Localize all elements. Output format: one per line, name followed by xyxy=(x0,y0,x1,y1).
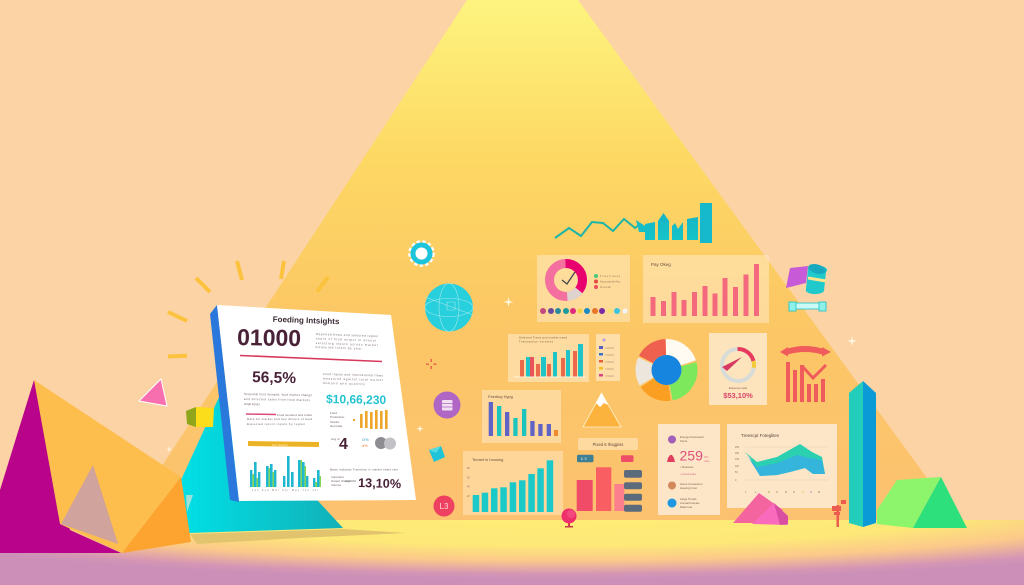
panel: teal growth bar card xyxy=(463,451,563,515)
x axis ticks: H xyxy=(776,490,778,494)
x axis ticks: 1 xyxy=(755,490,757,494)
check mark xyxy=(562,272,575,284)
card header: Pixed 6 Ihagpiss xyxy=(593,442,623,447)
donut legend: Overall xyxy=(600,285,611,289)
bars xyxy=(473,460,553,512)
intro text xyxy=(316,332,378,351)
stat four: 4 xyxy=(339,436,348,453)
sub rows xyxy=(680,465,697,476)
magenta facet xyxy=(0,380,121,553)
panel: pink bar chart card xyxy=(643,255,769,323)
donut chart xyxy=(550,264,582,296)
axis labels: 40 xyxy=(467,486,470,488)
legend rows: Category xyxy=(605,374,615,378)
icon: pink triangle xyxy=(139,379,167,406)
list row three: Data note xyxy=(680,505,693,509)
orange facet xyxy=(122,477,191,553)
red bars xyxy=(577,467,624,511)
axis labels: 60 xyxy=(467,476,470,480)
pink rule with text: Data for market and key drivers of feed xyxy=(247,417,312,421)
bottom note: Output change xyxy=(331,479,351,483)
x axis ticks xyxy=(745,490,820,494)
axis labels: 100 xyxy=(735,465,740,468)
list row two: Housing Cost xyxy=(680,486,697,490)
legend rows xyxy=(599,346,615,378)
card title: Treescpt Foteglites xyxy=(741,433,780,438)
paragraph left xyxy=(244,392,312,407)
panel: stat list card xyxy=(658,424,720,515)
icon: red signpost xyxy=(832,500,846,527)
stat percentage: 56,5% xyxy=(252,369,296,387)
money figure: $10,66,230 xyxy=(326,392,387,407)
area layers xyxy=(745,444,825,476)
icon: gear xyxy=(410,242,434,266)
paragraph left: small inputs xyxy=(244,402,260,406)
card title: Tenant in housing xyxy=(472,457,503,462)
icon: red arrows and bars xyxy=(780,346,831,402)
list row one: Energy Framework xyxy=(680,435,704,439)
list row two: Home Conversion xyxy=(680,482,703,486)
panel: legend card xyxy=(596,334,620,381)
stat four: , xyxy=(349,443,350,448)
small list: Stocks xyxy=(330,420,340,424)
x axis ticks: B xyxy=(785,490,787,494)
intro text: selecting inputs across market xyxy=(316,341,378,347)
icon: teal cube xyxy=(429,446,445,462)
intro text: measured totals by year xyxy=(316,345,362,351)
icon: red target mark xyxy=(426,359,436,369)
stat note right xyxy=(323,372,384,387)
big stat: 259 xyxy=(680,448,703,464)
grouped bars xyxy=(514,344,586,377)
yellow facet xyxy=(34,380,181,553)
axis labels xyxy=(467,467,470,498)
donut legend: Accountability xyxy=(600,280,621,284)
axis labels: 250 xyxy=(735,446,740,449)
gauge value: $53,10% xyxy=(723,391,753,400)
legend pills: £ 3 xyxy=(581,456,587,461)
card heading: Transaction volumes xyxy=(519,340,554,344)
small list: Food xyxy=(330,411,337,415)
legend rows: Category xyxy=(605,346,615,350)
card heading: Selected Trend and market trend xyxy=(519,336,567,340)
pale sliver xyxy=(186,495,193,512)
icon: red badge: L3 xyxy=(440,502,449,511)
icon row xyxy=(540,308,628,314)
icon: yellow cube xyxy=(186,407,214,427)
panel: red bars card xyxy=(577,438,642,512)
intro text: share of food output in annual xyxy=(316,336,376,343)
x axis ticks: A xyxy=(802,490,804,494)
list row two xyxy=(668,482,703,490)
list row one: Score xyxy=(680,439,688,443)
axis labels: 200 xyxy=(735,452,740,455)
axis labels xyxy=(735,446,740,482)
icon: snow mountain xyxy=(583,393,621,427)
report page xyxy=(217,305,416,501)
x axis ticks: N xyxy=(793,490,795,494)
donut legend xyxy=(594,274,621,289)
bars xyxy=(650,264,759,316)
intro text: Reported flows and selected region xyxy=(316,332,378,338)
legend rows: Category xyxy=(605,368,615,370)
icon: green tent xyxy=(877,477,967,528)
icon: teal pyramid behind report xyxy=(181,395,343,533)
list row three xyxy=(668,497,700,509)
card title: Feeding Hypg xyxy=(488,394,513,399)
big stat xyxy=(667,448,710,464)
pink rule with text xyxy=(246,413,312,426)
big stat: 0% xyxy=(704,455,709,459)
axis labels: 150 xyxy=(735,458,740,461)
sub rows: • Linked sales xyxy=(680,472,697,476)
panel: gauge card xyxy=(709,333,767,405)
grey badges xyxy=(362,437,396,450)
small list xyxy=(330,411,345,428)
x axis ticks: B xyxy=(768,490,770,494)
legend rows: Category xyxy=(605,360,615,364)
tan facet xyxy=(61,465,118,544)
pink rule with text: Expected return inputs by region xyxy=(247,422,305,426)
card title: Pay Okeg xyxy=(651,262,671,267)
grid lines xyxy=(745,447,828,480)
decorative rays xyxy=(168,261,328,356)
panel: grouped bar card xyxy=(508,334,589,382)
list row three: Large Trends xyxy=(680,497,697,501)
mini bar chart xyxy=(250,456,321,492)
yellow header bar: Key Section xyxy=(272,443,288,447)
x axis ticks: N xyxy=(810,490,812,494)
grey badges: a% xyxy=(362,443,368,448)
panel: donut card xyxy=(537,255,630,322)
bottom note: Basic indicator Transition in market share rate xyxy=(330,468,398,472)
yellow header bar xyxy=(248,441,319,447)
left geometric shapes xyxy=(0,380,193,553)
list row three: Annual forecast xyxy=(680,501,700,505)
stat four xyxy=(331,436,350,453)
stat four: Avg of xyxy=(331,437,340,441)
pink rule with text: Food demand and bullet xyxy=(277,413,312,417)
mini bar chart: Jan Feb Mar Apr May Jun Jul xyxy=(252,489,318,492)
axis labels: 20 xyxy=(467,495,470,498)
axis labels: 0 xyxy=(735,479,737,482)
icon: teal blue column xyxy=(849,381,876,527)
small list: Net trade xyxy=(330,424,343,428)
report title: Foeding Intsights xyxy=(273,315,340,326)
orange bars xyxy=(353,410,388,429)
bottom note xyxy=(330,468,398,487)
grey pills xyxy=(624,470,642,512)
x axis ticks: M xyxy=(818,490,820,494)
list row one xyxy=(668,435,704,444)
floor xyxy=(0,520,1024,585)
gauge needle xyxy=(722,357,742,371)
stat note right: demand and quantity xyxy=(323,381,365,386)
sub rows: • Tenancies xyxy=(680,465,694,469)
legend rows: Category xyxy=(605,354,615,356)
panel: report sheet xyxy=(210,305,416,502)
dumbbell bar xyxy=(789,302,826,311)
chart: teal line and bars xyxy=(555,203,712,243)
icon: globe xyxy=(425,284,473,332)
bars xyxy=(489,402,558,436)
grey badges: O% xyxy=(362,437,369,442)
axis labels: 80 xyxy=(467,467,470,470)
gauge dial xyxy=(722,349,754,381)
panel: area chart card xyxy=(727,424,837,508)
stat note right: Food inputs and international flows xyxy=(323,372,384,378)
stat note right: measured against total market xyxy=(323,376,383,382)
icon: red badge xyxy=(434,496,454,516)
light beam trapezoid xyxy=(120,0,965,530)
icon: flag and cylinder xyxy=(786,262,827,311)
bottom note: Important xyxy=(331,475,344,479)
big number: 01000 xyxy=(237,324,301,351)
paragraph left: and selected sales from food markets xyxy=(244,397,310,402)
small list: Production xyxy=(330,415,345,419)
icon: red pin ball xyxy=(562,508,576,528)
bottom note: Volume xyxy=(331,483,341,487)
report shadow xyxy=(190,529,406,544)
gauge label: Expense ratio xyxy=(729,386,747,390)
x axis ticks: 1 xyxy=(745,490,747,494)
stat bottom percentage: 13,10% xyxy=(358,476,401,491)
red divider xyxy=(240,356,382,362)
big stat: ratio xyxy=(704,459,710,463)
icon: purple list badge xyxy=(434,392,460,418)
icon: pink pyramids xyxy=(733,493,788,525)
panel: purple teal bar card xyxy=(482,390,561,443)
icon: sparkles xyxy=(166,297,857,452)
paragraph left: Seasonal food demand, food market change xyxy=(244,392,312,397)
donut legend: Timeliness xyxy=(600,274,621,278)
report side edge xyxy=(210,305,239,502)
axis labels: 50 xyxy=(735,471,738,474)
card heading xyxy=(519,336,567,344)
chart: large donut xyxy=(644,347,690,393)
